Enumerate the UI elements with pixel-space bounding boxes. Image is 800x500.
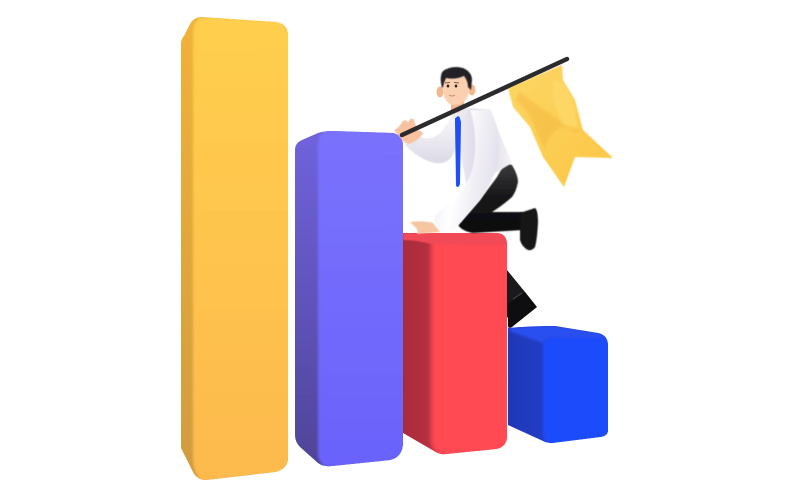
ears — [436, 84, 476, 98]
collar — [452, 106, 468, 120]
flag highlight — [553, 80, 578, 128]
bar: purple — [295, 128, 408, 470]
shirt: front arm — [435, 110, 499, 232]
flag shading — [515, 92, 583, 150]
hand: lower — [410, 221, 440, 234]
man: lower leg and shoe — [507, 270, 537, 328]
bar: blue — [508, 326, 612, 446]
bar: red — [403, 230, 512, 458]
shirt: torso — [452, 108, 512, 183]
trousers: thigh and knee — [458, 163, 523, 233]
bar: yellow — [181, 17, 292, 484]
head — [443, 76, 470, 105]
tie — [455, 115, 461, 187]
shoe: upper foot — [520, 208, 538, 250]
face details — [445, 82, 459, 96]
flag — [508, 65, 613, 187]
neck — [451, 100, 464, 113]
shirt: rear arm — [405, 113, 458, 163]
flag pole — [402, 59, 567, 135]
hand: on pole — [394, 119, 423, 144]
man — [394, 59, 613, 250]
hair — [441, 67, 472, 90]
